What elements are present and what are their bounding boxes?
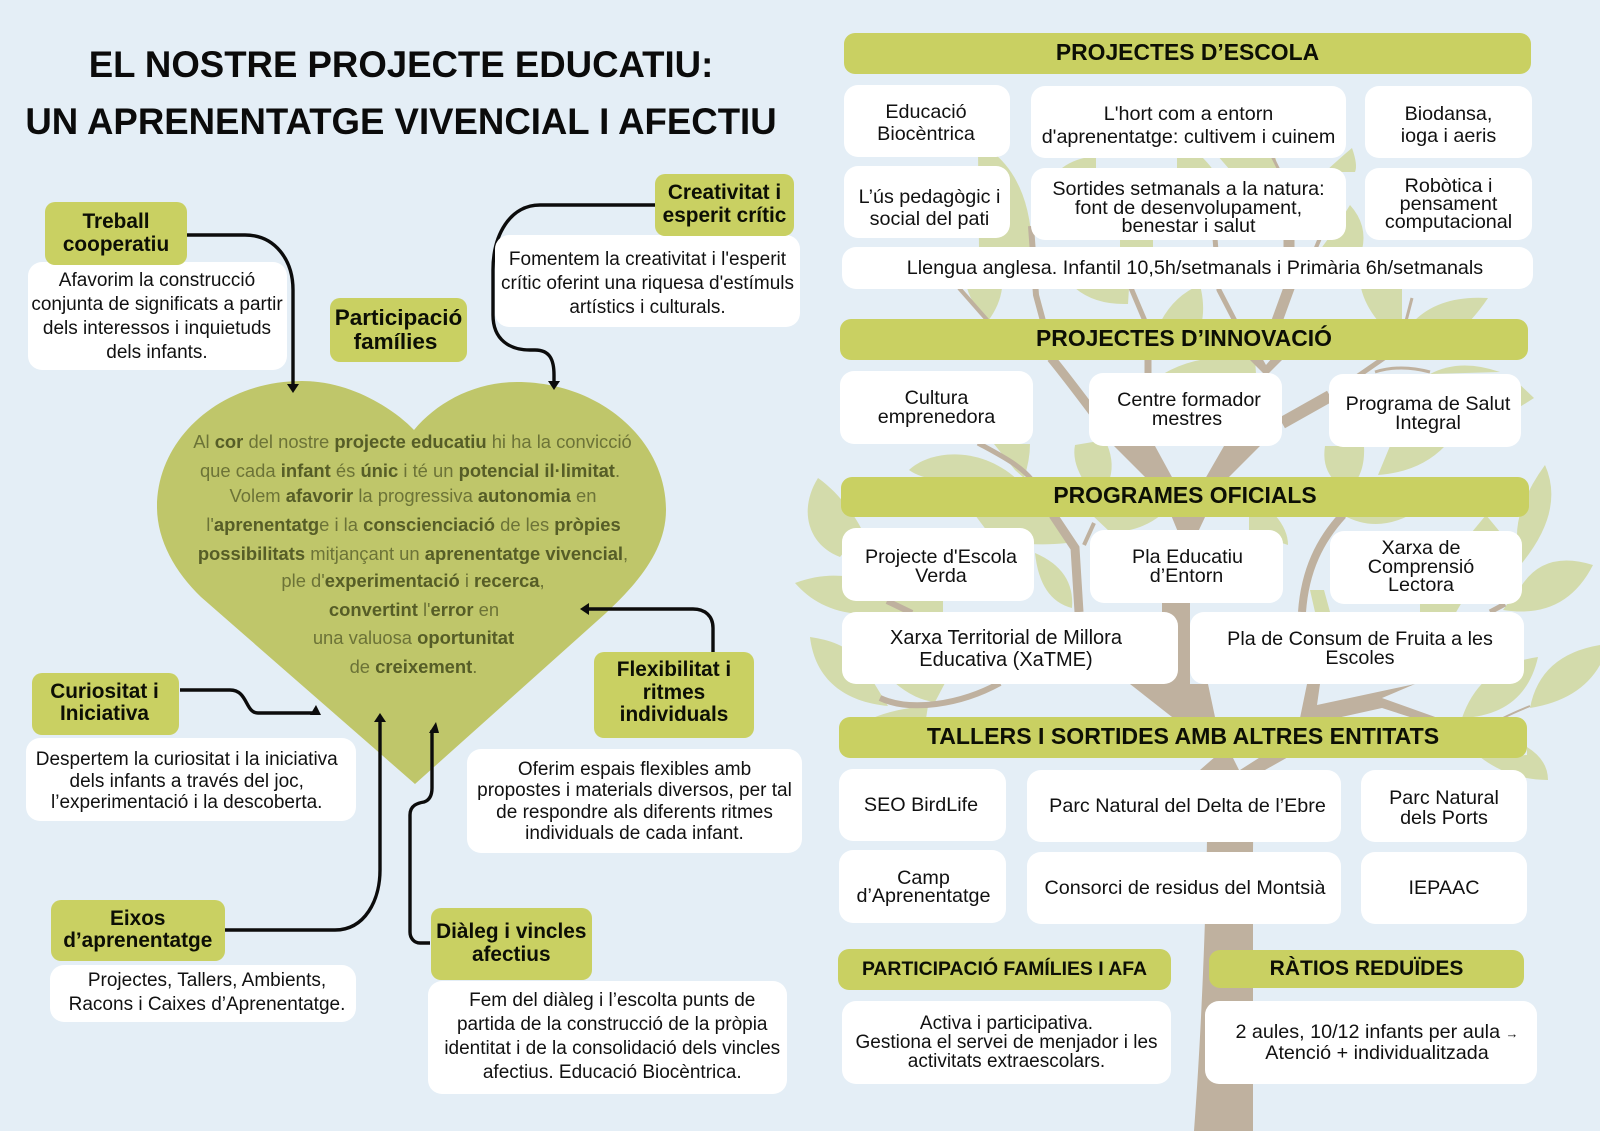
box: parc dels ports: Parc Natural [1389, 787, 1499, 809]
box: pati [844, 166, 1010, 238]
heading: projectes d'innovacio: PROJECTES D’INNOVACIÓ [1036, 324, 1332, 350]
text: curiositat: dels infants a través del joc, [70, 771, 304, 792]
tag: creativitat: Creativitat i [668, 181, 781, 204]
box: robotica: computacional [1385, 211, 1512, 233]
heading: ratios reduides [1209, 950, 1524, 988]
text: dialeg: identitat i de la consolidació dels vincles [444, 1038, 780, 1059]
text: treball cooperatiu: Afavorim la construcció [59, 270, 255, 291]
tag: treball cooperatiu [45, 202, 187, 265]
box: seo birdlife [839, 769, 1006, 841]
box: consum fruita [1190, 612, 1524, 684]
box: robotica: pensament [1400, 193, 1497, 215]
box: educacio biocentrica: Biocèntrica [877, 122, 975, 144]
box: sortides [1031, 168, 1346, 240]
heart shape [157, 381, 666, 784]
box: 2 aules: Atenció + individualitzada [1265, 1042, 1489, 1064]
box: cultura emprenedora: emprenedora [878, 406, 995, 428]
tag: flexibilitat: Flexibilitat i [617, 658, 731, 681]
heading: projectes d'innovacio [840, 319, 1528, 360]
box: pla educatiu [1090, 530, 1283, 603]
heading: tallers i sortides [839, 717, 1527, 758]
text: treball cooperatiu [28, 262, 287, 370]
box: pla educatiu: d’Entorn [1150, 564, 1223, 586]
text: flexibilitat: propostes i materials diversos, per tal [477, 780, 792, 801]
box: consum fruita: Escoles [1325, 647, 1395, 669]
arrow: curiositat to heart [180, 688, 321, 715]
heading: projectes d'escola [844, 33, 1531, 74]
heart text: possibilitats mitjançant un aprenentatge vivencial, [198, 542, 628, 564]
box: consum fruita: Pla de Consum de Fruita a les [1227, 628, 1493, 650]
box: parc dels ports [1361, 770, 1527, 842]
text: creativitat: artístics i culturals. [569, 297, 726, 318]
tag: participacio families [330, 298, 467, 362]
box: pati: L’ús pedagògic i [859, 186, 1000, 208]
tag: dialeg: afectius [472, 943, 551, 966]
heading: participacio families i afa: PARTICIPACIÓ FAMÍLIES I AFA [862, 958, 1147, 980]
box: biodansa: Biodansa, [1405, 102, 1492, 124]
box: delta de l'ebre: Parc Natural del Delta de l’Ebre [1049, 794, 1326, 816]
title: UN APRENENTATGE VIVENCIAL I AFECTIU [25, 101, 777, 142]
box: xarxa comprensio: Comprensió [1368, 556, 1474, 578]
box: activa i participativa: Activa i participativa. [920, 1013, 1093, 1034]
tag: curiositat [32, 673, 179, 735]
heart text: de creixement. [350, 656, 477, 677]
arrow: creativitat to heart [491, 203, 655, 390]
box: 2 aules [1205, 1001, 1537, 1084]
tag: dialeg: Diàleg i vincles [436, 920, 586, 943]
tag: participacio families: famílies [354, 328, 437, 354]
tag: dialeg [430, 908, 592, 980]
tag: creativitat: esperit crític [663, 204, 786, 227]
heart text: una valuosa oportunitat [313, 627, 514, 648]
arrow: treball cooperatiu to heart [187, 233, 299, 393]
heading: programes oficials [841, 476, 1529, 517]
box: l'hort [1031, 86, 1346, 158]
box: xatme: Educativa (XaTME) [919, 649, 1093, 671]
box: cultura emprenedora: Cultura [905, 387, 968, 409]
box: educacio biocentrica: Educació [885, 101, 967, 123]
heart text [193, 431, 632, 677]
heading: projectes d'escola: PROJECTES D’ESCOLA [1056, 38, 1319, 64]
heart text: Volem afavorir la progressiva autonomia en [230, 485, 596, 506]
box: biodansa: ioga i aeris [1401, 124, 1496, 146]
text: eixos: Racons i Caixes d’Aprenentatge. [69, 994, 345, 1015]
tag: creativitat [655, 174, 794, 236]
arrow: eixos to heart [225, 713, 386, 932]
title [25, 44, 777, 142]
box: consorci de residus [1027, 852, 1341, 924]
tag: curiositat: Iniciativa [60, 702, 149, 725]
tag: flexibilitat [594, 652, 754, 738]
box: iepaac: IEPAAC [1408, 876, 1479, 898]
box: xatme: Xarxa Territorial de Millora [890, 627, 1122, 649]
box: 2 aules: 2 aules, 10/12 infants per aula → [1235, 1021, 1519, 1043]
heading: participacio families i afa [838, 949, 1171, 990]
box: biodansa [1365, 86, 1532, 158]
box: iepaac [1361, 852, 1527, 924]
box: llengua anglesa [842, 247, 1533, 289]
title: EL NOSTRE PROJECTE EDUCATIU: [89, 44, 713, 85]
box: activa i participativa: activitats extraescolars. [908, 1051, 1105, 1072]
box: xarxa comprensio [1330, 531, 1522, 604]
text: curiositat: Despertem la curiositat i la iniciativa [36, 749, 338, 770]
box: salut integral: Integral [1395, 412, 1461, 434]
arrow: dialeg to heart [408, 722, 439, 945]
box: robotica [1365, 168, 1532, 240]
box: l'hort: L'hort com a entorn [1104, 102, 1273, 124]
box: robotica: Robòtica i [1405, 175, 1492, 197]
box: pla educatiu: Pla Educatiu [1132, 546, 1243, 568]
text: treball cooperatiu: conjunta de significats a partir [31, 294, 283, 315]
text: dialeg: afectius. Educació Biocèntrica. [483, 1062, 742, 1083]
box: salut integral: Programa de Salut [1346, 393, 1510, 415]
box: camp d'aprenentatge: d’Aprenentatge [857, 885, 990, 907]
box: consorci de residus: Consorci de residus del Montsià [1044, 876, 1326, 898]
box: educacio biocentrica [844, 85, 1010, 157]
box: sortides: benestar i salut [1122, 215, 1255, 237]
box: activa i participativa: Gestiona el servei de menjador i les [855, 1032, 1158, 1053]
heart text: convertint l'error en [329, 599, 499, 620]
box: seo birdlife: SEO BirdLife [864, 794, 978, 816]
tag: eixos: d’aprenentatge [63, 929, 212, 952]
box: pati: social del pati [870, 208, 989, 230]
tag: eixos: Eixos [110, 907, 165, 930]
tag: curiositat: Curiositat i [50, 680, 159, 702]
text: flexibilitat: Oferim espais flexibles amb [518, 759, 751, 780]
box: camp d'aprenentatge: Camp [897, 867, 950, 889]
text: creativitat: crític oferint una riquesa d'estímuls [501, 273, 794, 294]
box: activa i participativa [842, 1001, 1171, 1084]
text: eixos: Projectes, Tallers, Ambients, [88, 970, 326, 990]
tag: participacio families: Participació [335, 304, 462, 330]
tag: eixos [50, 900, 225, 961]
box: salut integral [1329, 374, 1521, 447]
tag: flexibilitat: ritmes [643, 681, 705, 704]
box: llengua anglesa: Llengua anglesa. Infantil 10,5h/setmanals i Primària 6h/setmanals [907, 256, 1483, 278]
text: creativitat: Fomentem la creativitat i l'esperit [509, 249, 786, 270]
text: treball cooperatiu: dels interessos i inquietuds [43, 318, 271, 339]
text: curiositat: l’experimentació i la descoberta. [51, 792, 322, 813]
text: flexibilitat: individuals de cada infant. [525, 823, 744, 844]
box: escola verda: Projecte d'Escola [865, 546, 1017, 568]
box: sortides: font de desenvolupament, [1075, 197, 1302, 219]
box: cultura emprenedora [840, 371, 1033, 444]
heart text: l'aprenentatge i la conscienciació de les pròpies [206, 514, 621, 534]
box: l'hort: d'aprenentatge: cultivem i cuinem [1042, 126, 1335, 148]
box: xarxa comprensio: Xarxa de [1381, 537, 1461, 559]
tag: treball cooperatiu: cooperatiu [63, 233, 169, 256]
box: centre formador [1089, 373, 1282, 446]
box: xarxa comprensio: Lectora [1388, 574, 1454, 596]
tag: treball cooperatiu: Treball [82, 210, 150, 233]
box: centre formador: mestres [1152, 408, 1222, 430]
text: curiositat [26, 738, 356, 821]
heart text: Al cor del nostre projecte educatiu hi ha la convicció [193, 431, 632, 452]
box: escola verda [842, 528, 1034, 601]
box: camp d'aprenentatge [839, 850, 1006, 923]
text: dialeg [428, 980, 787, 1094]
heading: ratios reduides: RÀTIOS REDUÏDES [1270, 956, 1463, 980]
text: treball cooperatiu: dels infants. [106, 342, 208, 363]
text: eixos [50, 965, 356, 1022]
heart text: ple d'experimentació i recerca, [281, 570, 545, 591]
box: delta de l'ebre [1027, 770, 1341, 842]
box: xatme [842, 612, 1178, 684]
box: sortides: Sortides setmanals a la natura: [1052, 178, 1325, 200]
heading: programes oficials: PROGRAMES OFICIALS [1053, 482, 1317, 508]
box: escola verda: Verda [915, 565, 967, 587]
text: flexibilitat [467, 749, 802, 853]
heart text: que cada infant és únic i té un potencial il·limitat. [200, 460, 620, 481]
text: dialeg: Fem del diàleg i l’escolta punts de [469, 990, 755, 1011]
box: centre formador: Centre formador [1117, 389, 1261, 411]
text: dialeg: partida de la construcció de la pròpia [457, 1014, 768, 1035]
heading: tallers i sortides: TALLERS I SORTIDES AMB ALTRES ENTITATS [927, 723, 1439, 749]
text: creativitat [495, 235, 800, 327]
box: parc dels ports: dels Ports [1400, 806, 1488, 828]
tag: flexibilitat: individuals [620, 703, 728, 726]
text: flexibilitat: de respondre als diferents ritmes [496, 802, 773, 822]
arrow: flexibilitat to heart [580, 603, 715, 652]
